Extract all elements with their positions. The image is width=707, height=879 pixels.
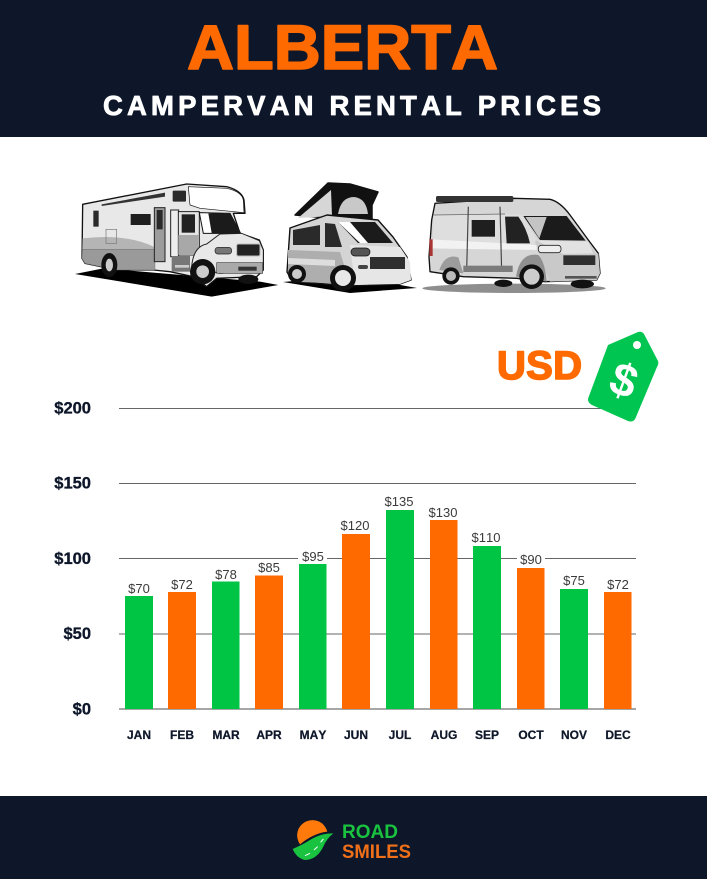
bars (125, 510, 632, 709)
month labels: DEC (605, 728, 631, 742)
month labels: OCT (518, 728, 544, 742)
header band (0, 0, 707, 137)
icon: green price tag: $ (603, 351, 645, 409)
value labels: $135 (385, 494, 413, 509)
month labels (127, 728, 631, 742)
month labels: NOV (561, 728, 587, 742)
logo text: ROAD (342, 821, 398, 843)
month labels: JUN (344, 728, 368, 742)
month labels: FEB (170, 728, 194, 742)
month labels: MAR (212, 728, 240, 742)
y axis labels: $0 (73, 700, 91, 718)
logo (293, 820, 411, 863)
value labels: $78 (215, 567, 237, 582)
vehicle: panel campervan (422, 196, 606, 293)
subtitle: CAMPERVAN RENTAL PRICES (103, 90, 601, 121)
month labels: JUL (389, 728, 411, 742)
value labels: $85 (258, 560, 280, 575)
bar chart (54, 400, 636, 742)
y axis labels: $150 (54, 474, 91, 492)
y axis labels: $100 (54, 550, 91, 568)
currency label: USD (497, 344, 582, 388)
y axis labels: $50 (63, 625, 91, 643)
value labels: $120 (341, 518, 369, 533)
value labels: $72 (171, 577, 193, 592)
month labels: SEP (475, 728, 499, 742)
icon: green price tag (588, 332, 658, 422)
value labels: $70 (128, 581, 150, 596)
value labels: $72 (607, 577, 629, 592)
value labels: $75 (563, 573, 585, 588)
vehicle: pop-top camper (283, 183, 417, 293)
month labels: AUG (431, 728, 457, 742)
month labels: APR (256, 728, 282, 742)
value labels: $95 (302, 549, 324, 564)
value labels: $130 (429, 505, 457, 520)
logo mark (293, 820, 333, 860)
logo: SMILES (342, 841, 411, 863)
value labels: $110 (472, 530, 500, 545)
illustration: three campervans (75, 183, 606, 297)
title: ALBERTA (187, 13, 498, 83)
y axis labels: $200 (54, 400, 91, 418)
month labels: JAN (127, 728, 151, 742)
y axis labels (54, 400, 91, 718)
month labels: MAY (300, 728, 326, 742)
value labels (128, 494, 629, 596)
value labels: $90 (520, 552, 542, 567)
footer band (0, 796, 707, 879)
vehicle: class C motorhome (75, 184, 278, 297)
